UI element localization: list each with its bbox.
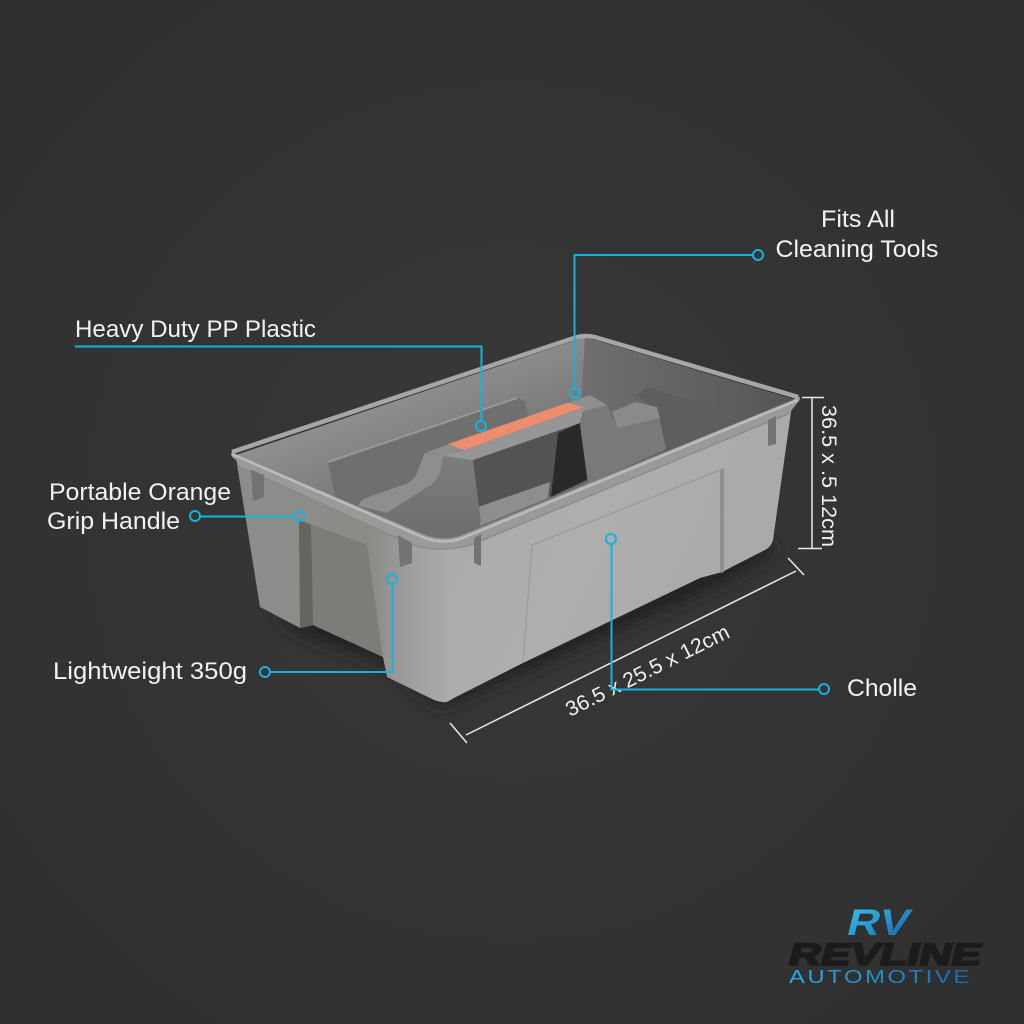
- floor shadow: [270, 540, 775, 708]
- orange grip strip: [448, 403, 584, 450]
- callout: Fits All Cleaning Tools: [570, 206, 938, 398]
- left recessed panel: [300, 520, 383, 657]
- label text: Fits All: [821, 206, 895, 233]
- leader line: [271, 585, 392, 672]
- anchor dots: [570, 250, 763, 398]
- leader line: [75, 346, 482, 420]
- leader line: [200, 516, 293, 518]
- left outer face: [236, 458, 447, 702]
- anchor dot: [476, 421, 486, 431]
- interior back-left wall: [236, 337, 585, 545]
- label text: Cholle: [847, 675, 917, 702]
- label text: Portable Orange: [49, 479, 231, 506]
- left arm top: [359, 453, 443, 513]
- label text: Cleaning Tools: [776, 236, 938, 263]
- handle front face: [443, 408, 584, 460]
- back rim: [232, 336, 798, 452]
- logo wordmark: REVLINE: [785, 937, 986, 972]
- logo RV mark: RV: [843, 902, 915, 943]
- dimension text: 36.5 x 25.5 x 12cm: [562, 621, 733, 721]
- dimension bracket: [798, 397, 824, 548]
- window backdrop: [473, 423, 590, 525]
- leader line: [612, 545, 818, 690]
- rim tabs: [251, 416, 776, 567]
- logo: Revline Automotive: [785, 902, 986, 987]
- label text: Grip Handle: [47, 508, 180, 535]
- interior base fill: [236, 337, 796, 545]
- callout: Lightweight 350g: [53, 574, 397, 685]
- front outer face: [445, 405, 792, 702]
- rim lip highlight: [232, 400, 798, 541]
- dimension: length: [450, 558, 804, 743]
- callout: Heavy Duty PP Plastic: [75, 316, 486, 431]
- anchor dots: [190, 511, 304, 521]
- rim band: [231, 396, 800, 548]
- handle top bar: [427, 395, 607, 456]
- dimension line: [450, 558, 804, 743]
- rim lower shadow edge: [241, 413, 790, 549]
- logo subtitle: AUTOMOTIVE: [789, 967, 972, 987]
- front panel right edge: [720, 468, 724, 573]
- label text: [776, 206, 938, 263]
- right arm top: [612, 402, 660, 428]
- label text: Heavy Duty PP Plastic: [75, 316, 316, 343]
- anchor dots: [260, 574, 397, 677]
- partition plate highlight: [328, 398, 517, 462]
- callout: Portable Orange Grip Handle: [47, 479, 304, 535]
- window dark gap: [551, 423, 590, 497]
- front recessed panel edges: [523, 470, 720, 663]
- dimension text: 36.5 x .5 12cm: [817, 405, 840, 547]
- anchor dots: [606, 534, 829, 694]
- label text: Lightweight 350g: [53, 658, 247, 685]
- back-right wall block: [637, 387, 717, 453]
- dimension: height: [798, 397, 840, 548]
- right handle shoulder: [580, 402, 666, 484]
- left panel dark strip: [299, 520, 313, 628]
- left handle body: [359, 445, 481, 541]
- label text: [47, 479, 231, 535]
- leader line: [574, 255, 752, 388]
- window floor: [478, 482, 550, 526]
- callout: Cholle: [606, 534, 917, 702]
- interior back-right wall: [447, 337, 796, 545]
- back-left wall partition plate: [328, 398, 540, 540]
- storage caddy tub: [231, 336, 800, 702]
